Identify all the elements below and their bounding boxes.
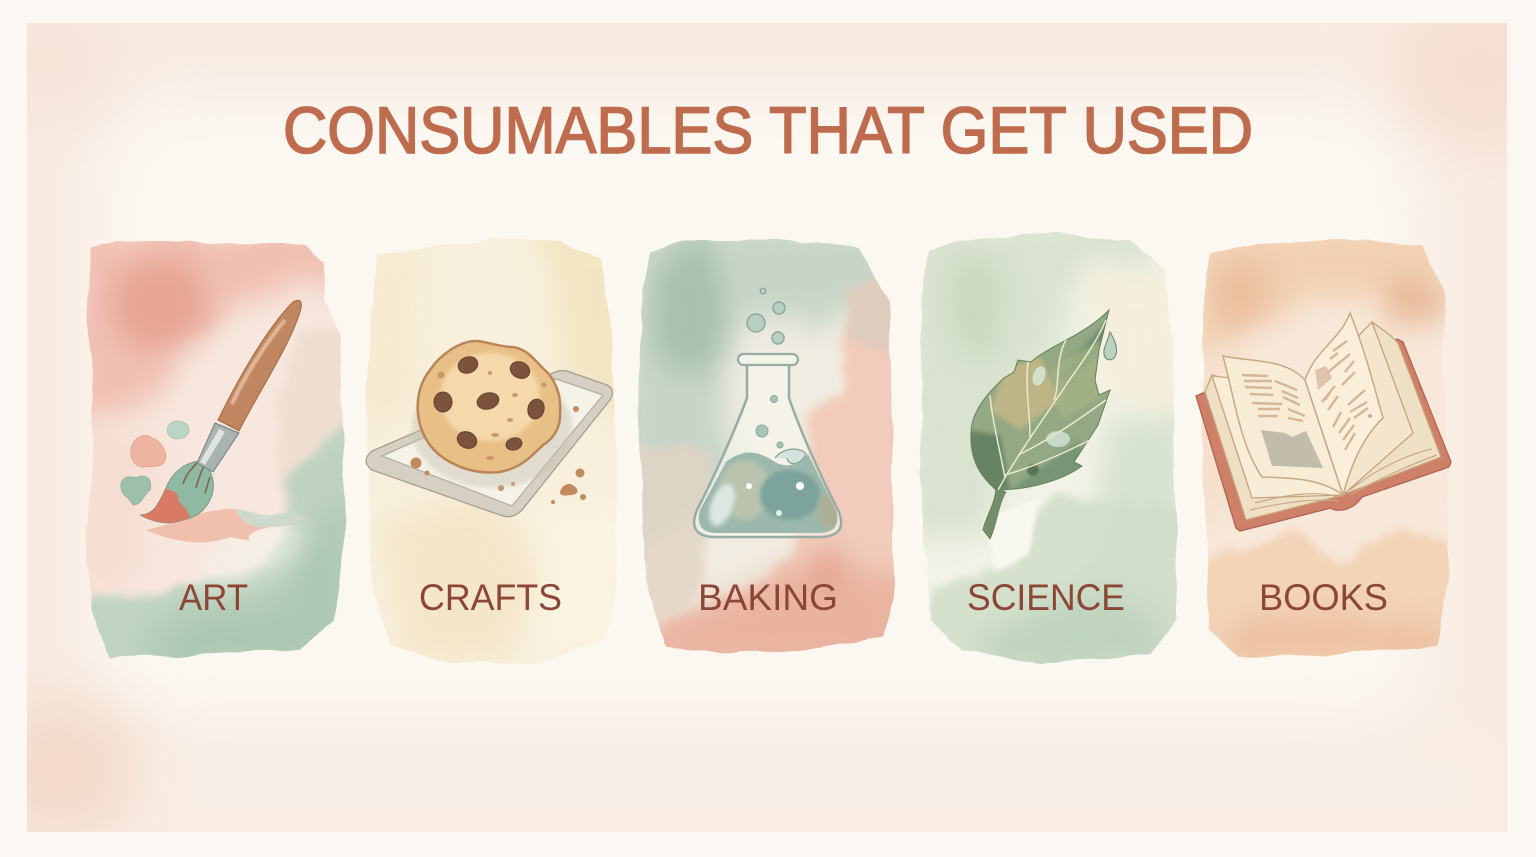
- bubbles above flask: [747, 288, 785, 344]
- label: ART: ART: [179, 577, 248, 618]
- panel: science: [920, 232, 1178, 664]
- cookie shadow: [412, 368, 572, 488]
- tray: [366, 370, 612, 517]
- left page text: [1242, 375, 1305, 421]
- flask glass: [694, 364, 841, 537]
- paint smear: [146, 509, 306, 542]
- icon: paint brush: [121, 300, 306, 542]
- page stacks: [1205, 322, 1441, 520]
- book cover: [1196, 339, 1451, 531]
- flask liquid: [698, 452, 838, 533]
- label: CRAFTS: CRAFTS: [419, 577, 562, 618]
- curled pages: [1223, 356, 1343, 495]
- science watercolor wash: [920, 232, 1178, 664]
- leaf outline: [971, 310, 1110, 490]
- icon: leaf with water drop: [970, 308, 1118, 540]
- panel: baking: [638, 238, 895, 654]
- label: BOOKS: BOOKS: [1259, 577, 1388, 618]
- label: BAKING: BAKING: [698, 577, 838, 618]
- icon: cookie on baking tray: [366, 341, 612, 517]
- crumbs: [410, 406, 586, 504]
- icon: flask with bubbles: [690, 288, 845, 540]
- crafts watercolor wash: [366, 238, 618, 664]
- bristles: [140, 461, 213, 523]
- panel: books: [1195, 238, 1452, 658]
- leaf blade: [971, 312, 1110, 490]
- handle: [218, 300, 301, 431]
- ferrule: [197, 423, 239, 472]
- label: SCIENCE: SCIENCE: [967, 577, 1125, 618]
- flask inner bubbles: [746, 396, 806, 516]
- right page text: [1322, 341, 1368, 450]
- page edge lines: [1250, 449, 1437, 510]
- cookie specks: [438, 371, 546, 460]
- paint dabs: [121, 421, 189, 505]
- left page picture: [1261, 430, 1323, 468]
- baking watercolor wash: [638, 238, 895, 654]
- flask lip: [738, 354, 798, 365]
- cookie: [418, 341, 560, 473]
- panel: crafts: [365, 238, 618, 664]
- stem: [983, 488, 1006, 539]
- icon: open book: [1196, 313, 1451, 531]
- title: CONSUMABLES THAT GET USED: [283, 93, 1253, 167]
- art watercolor wash: [86, 240, 346, 658]
- books watercolor wash: [1201, 238, 1450, 658]
- panel: art: [86, 240, 346, 658]
- water drop: [1104, 332, 1117, 360]
- chocolate chips: [434, 354, 546, 452]
- leaf veins: [990, 320, 1106, 490]
